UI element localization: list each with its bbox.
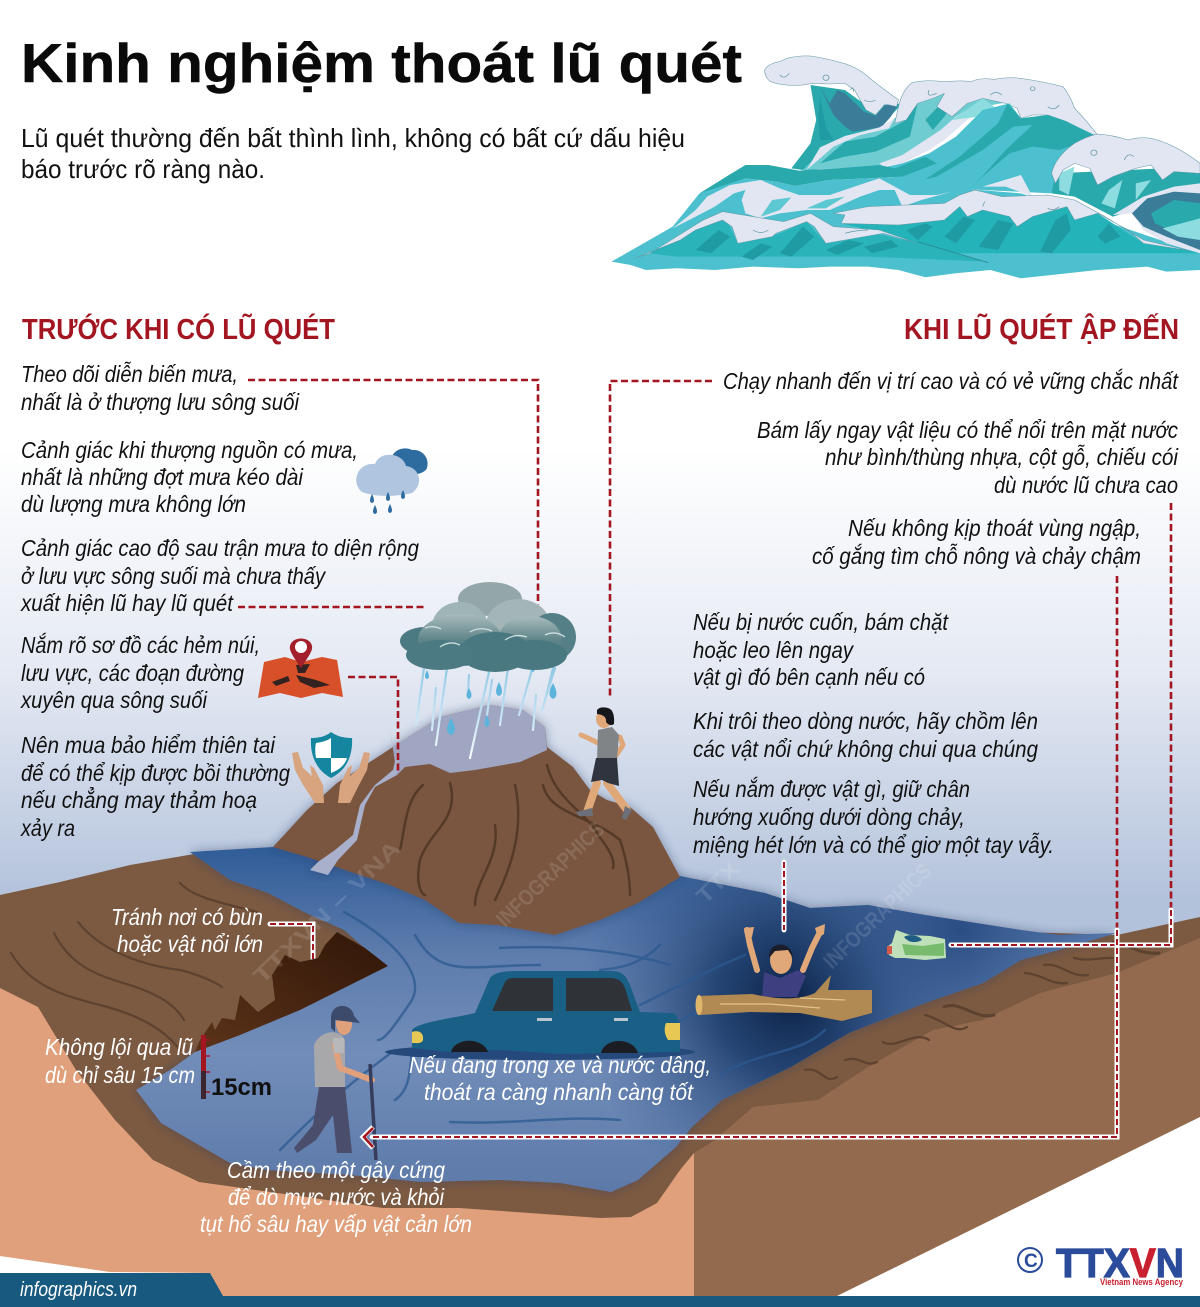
dashed connector: map <box>348 677 398 773</box>
text block: carry a stick: Cầm theo một gậy cứng <box>227 1157 445 1183</box>
text block: leave the car <box>409 1052 711 1105</box>
intro text <box>21 123 685 184</box>
text block: insurance: Nên mua bảo hiểm thiên tai <box>21 732 276 758</box>
watermarks: TTX <box>691 856 745 909</box>
dashed connector: monitor rainfall <box>248 380 538 605</box>
text block: do not wade <box>45 1034 195 1088</box>
text block: after heavy rain: Cảnh giác cao độ sau trận mưa to diện rộng <box>21 535 419 561</box>
text block: insurance: xảy ra <box>20 815 75 841</box>
icon: floating plastic bottle <box>887 930 946 960</box>
icon: rain cloud <box>356 448 428 514</box>
text block: feet downstream: miệng hét lớn và có thể giơ một tay vẫy. <box>693 831 1054 858</box>
text block: monitor rainfall <box>21 360 300 415</box>
text block: hold floating material: dù nước lũ chưa cao <box>994 472 1178 498</box>
logo: TTXVN: C <box>1024 1251 1038 1272</box>
dashed arrow: to walking stick <box>363 576 1117 1148</box>
footer: website: infographics.vn <box>20 1279 137 1301</box>
water dark shading <box>400 860 1117 1192</box>
label: 15cm: 15cm <box>211 1074 272 1101</box>
text block: upstream rain: Cảnh giác khi thượng nguồn có mưa, <box>21 437 358 463</box>
watermarks: TTXVN – VNA <box>248 835 406 989</box>
text block: if swept away <box>693 609 949 690</box>
watermarks <box>248 816 936 989</box>
text block: feet downstream <box>693 776 1054 858</box>
watermarks: INFOGRAPHICS <box>491 816 609 932</box>
icon: map with pin <box>258 638 343 698</box>
text block: climb over floating objects: các vật nổi chứ không chui qua chúng <box>693 736 1038 762</box>
text block: find shallow water <box>812 515 1141 569</box>
text block: avoid mud <box>111 904 263 957</box>
text block: leave the car: thoát ra càng nhanh càng tốt <box>424 1079 694 1105</box>
text block: carry a stick: tụt hố sâu hay vấp vật cản lớn <box>200 1211 472 1237</box>
text block: after heavy rain: ở lưu vực sông suối mà chưa thấy <box>21 563 326 589</box>
text block: insurance <box>20 732 290 841</box>
text block: know the terrain: lưu vực, các đoạn đường <box>21 660 244 686</box>
text block: upstream rain: dù lượng mưa không lớn <box>21 491 246 517</box>
figure: running person <box>576 707 632 820</box>
river water <box>136 847 1117 1192</box>
dashed connector: floating objects <box>951 503 1171 945</box>
background <box>0 0 1200 1000</box>
text block: after heavy rain: xuất hiện lũ hay lũ quét <box>20 590 234 616</box>
text block: find shallow water: Nếu không kịp thoát vùng ngập, <box>848 515 1141 541</box>
text block: insurance: để có thể kịp được bồi thường <box>21 760 290 786</box>
heading: when flash flood strikes: KHI LŨ QUÉT ẬP ĐẾN <box>904 312 1179 346</box>
text block: find shallow water: cố gắng tìm chỗ nông và chảy chậm <box>812 542 1141 569</box>
figure: person on log <box>696 924 872 1021</box>
text block: monitor rainfall: nhất là ở thượng lưu sông suối <box>21 389 300 415</box>
watermarks: INFOGRAPHICS <box>818 858 936 974</box>
mud slide <box>195 932 388 1052</box>
text block: know the terrain: xuyên qua sông suối <box>20 687 208 713</box>
depth scale <box>201 1035 210 1099</box>
dashed connector: mud warning <box>270 924 313 972</box>
mountain <box>273 705 680 935</box>
text block: avoid mud: Tránh nơi có bùn <box>111 904 263 930</box>
text block: upstream rain <box>21 437 358 517</box>
text block: carry a stick: để dò mực nước và khỏi <box>228 1184 445 1210</box>
figure: man with stick <box>294 1006 376 1160</box>
mountain gullies <box>400 765 630 905</box>
dashed connector: heavy rain <box>238 606 425 608</box>
text block: know the terrain <box>20 632 260 713</box>
text block: monitor rainfall: Theo dõi diễn biến mưa, <box>21 360 238 387</box>
text block: carry a stick <box>200 1157 472 1237</box>
text block: if swept away: hoặc leo lên ngay <box>693 637 854 663</box>
intro text: Lũ quét thường đến bất thình lình, không có bất cứ dấu hiệu <box>21 123 685 153</box>
text block: feet downstream: Nếu nắm được vật gì, giữ chân <box>693 776 970 802</box>
terrain: salmon soil <box>0 988 694 1296</box>
dashed connector: run to high ground <box>610 381 712 698</box>
text block: insurance: nếu chẳng may thảm hoạ <box>21 785 257 813</box>
storm cloud with rain <box>400 582 576 758</box>
logo: TTXVN: TTXVN <box>1056 1240 1184 1286</box>
text block: feet downstream: hướng xuống dưới dòng chảy, <box>693 804 965 830</box>
text block: leave the car: Nếu đang trong xe và nước dâng, <box>409 1052 711 1078</box>
logo: TTXVN: Vietnam News Agency <box>1100 1277 1184 1288</box>
icon: insurance shield with hands <box>292 732 370 803</box>
intro text: báo trước rõ ràng nào. <box>21 154 265 184</box>
text block: upstream rain: nhất là những đợt mưa kéo dài <box>21 464 304 490</box>
title: Kinh nghiệm thoát lũ quét <box>21 32 742 94</box>
text block: climb over floating objects: Khi trôi theo dòng nước, hãy chồm lên <box>693 708 1038 734</box>
figure: car in water <box>385 971 695 1060</box>
text block: avoid mud: hoặc vật nổi lớn <box>117 931 263 957</box>
text block: if swept away: vật gì đó bên cạnh nếu có <box>693 664 925 690</box>
terrain: brown river bank <box>0 853 1200 1218</box>
water flow lines <box>280 912 825 1150</box>
text block: do not wade: Không lội qua lũ <box>45 1034 193 1060</box>
terrain: right slope <box>694 925 1200 1296</box>
text block: know the terrain: Nắm rõ sơ đồ các hẻm núi, <box>21 632 260 658</box>
text block: after heavy rain <box>20 535 419 616</box>
text block: climb over floating objects <box>693 708 1038 762</box>
text block: hold floating material <box>757 417 1179 498</box>
illustration: breaking wave <box>611 56 1200 278</box>
text block: do not wade: dù chỉ sâu 15 cm <box>45 1062 195 1088</box>
footer bar <box>0 1273 1200 1307</box>
heading: before flash flood: TRƯỚC KHI CÓ LŨ QUÉT <box>22 312 335 346</box>
dashed connector: swept away person <box>782 862 786 930</box>
text block: if swept away: Nếu bị nước cuốn, bám chặt <box>693 609 949 635</box>
